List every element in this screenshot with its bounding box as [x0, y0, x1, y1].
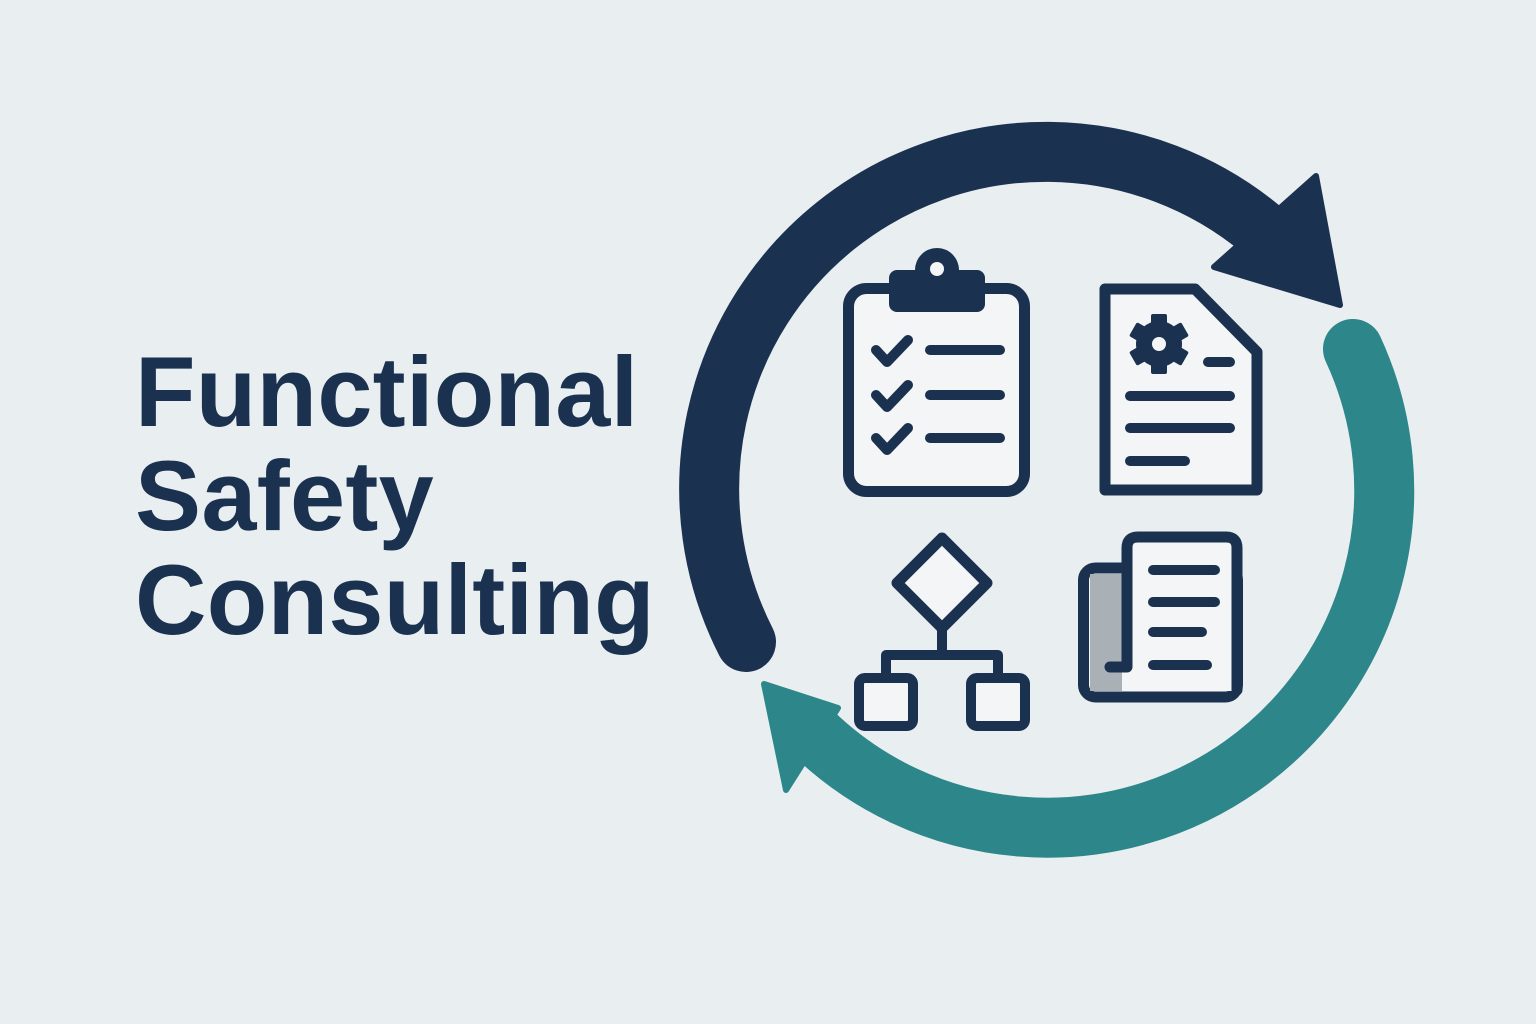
title: Functional: [135, 336, 638, 447]
title: Safety: [135, 440, 434, 551]
title: Consulting: [135, 544, 655, 655]
icon: flowchart: [859, 538, 1025, 726]
icon: document with gear: [1105, 289, 1257, 490]
arrow: navy cycle arc: [709, 152, 1340, 642]
title: [135, 336, 655, 655]
arrow: teal cycle arc: [764, 349, 1384, 828]
icon: checklist clipboard: [848, 248, 1024, 492]
icon: stacked documents: [1084, 537, 1238, 697]
